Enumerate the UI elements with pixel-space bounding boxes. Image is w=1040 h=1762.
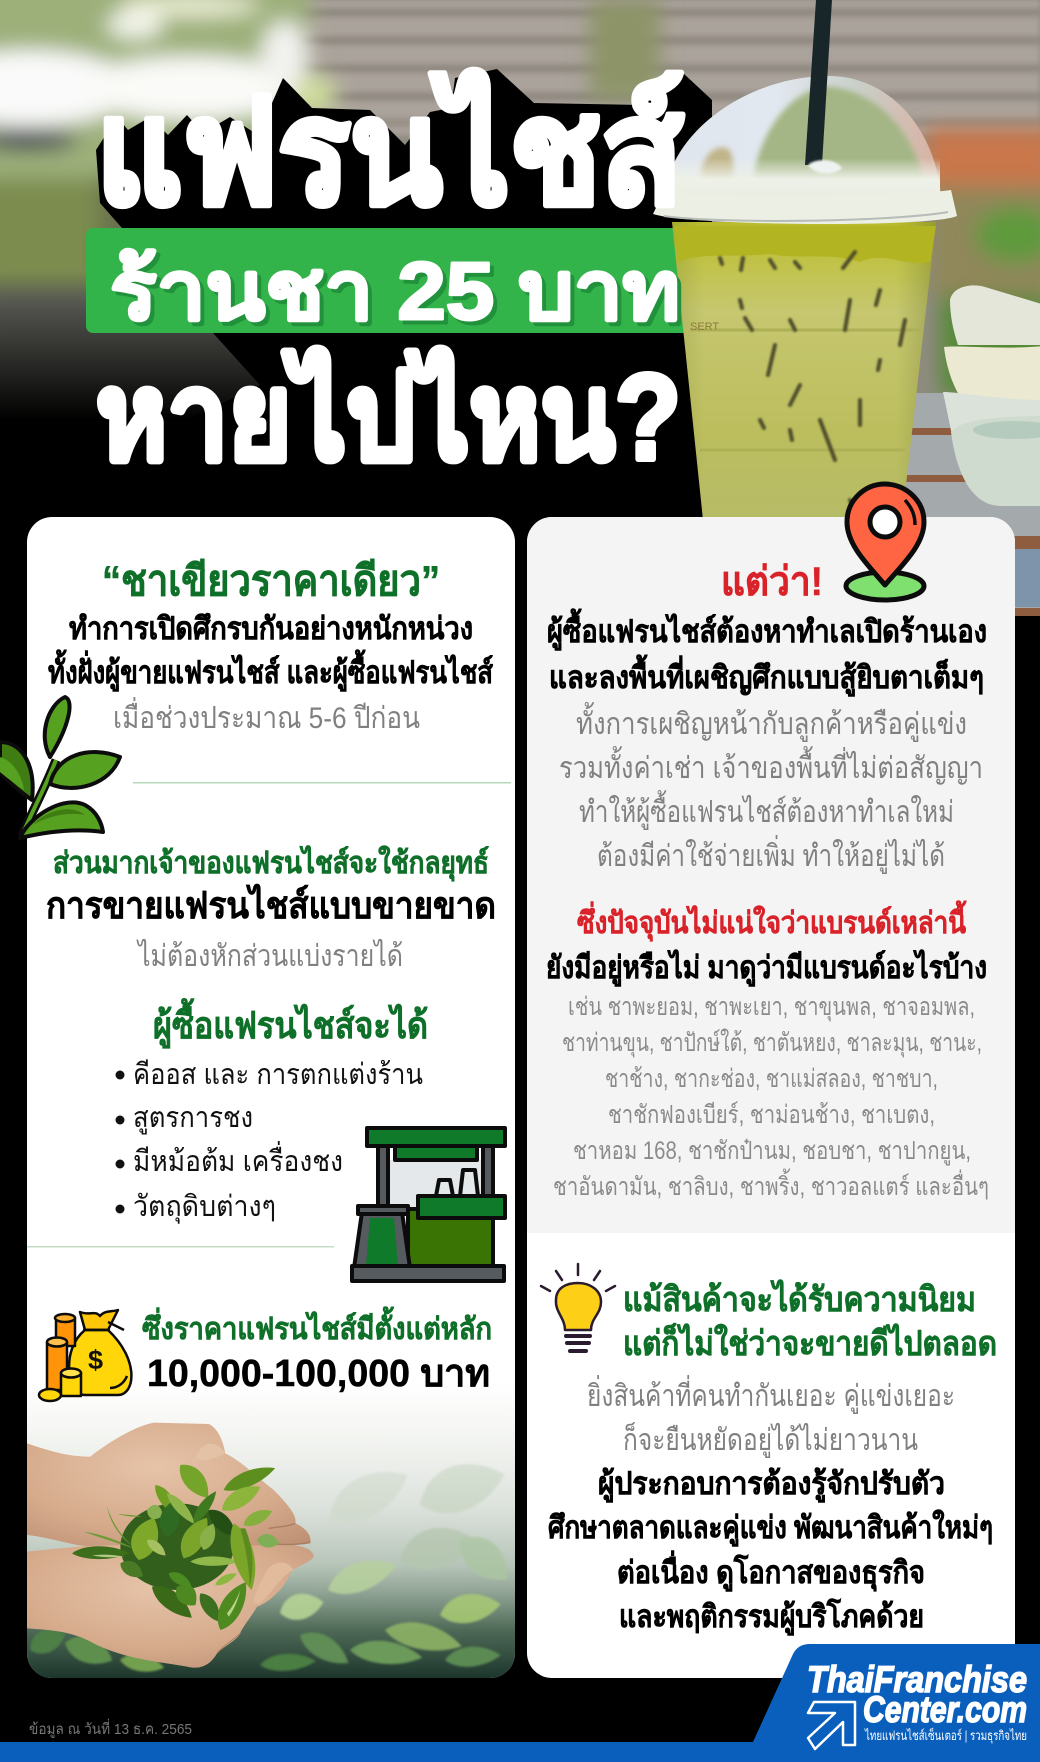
icon: tea leaves sprig <box>0 697 120 838</box>
list: buyer benefits <box>116 1059 423 1224</box>
logo text <box>807 1659 1027 1744</box>
heading: popularity not forever <box>623 1279 997 1363</box>
text: brand list <box>553 993 989 1201</box>
list: buyer benefits: สูตรการชง <box>133 1102 253 1135</box>
text: brand list: ชาช้าง, ชากะช่อง, ชาแม่สลอง, ชาชบา, <box>605 1065 938 1093</box>
heading: popularity not forever: แต่ก็ไม่ใช่ว่าจะขายดีไปตลอด <box>623 1322 997 1363</box>
title line 2: ร้านชา 25 บาท <box>114 250 684 341</box>
heading: what buyers get: ผู้ซื้อแฟรนไชส์จะได้ <box>153 998 428 1049</box>
icon: tea kiosk <box>352 1128 505 1281</box>
text: location challenge: ผู้ซื้อแฟรนไชส์ต้องหาทำเลเปิดร้านเอง <box>547 608 987 651</box>
text: franchise price range: 10,000-100,000 บาท <box>147 1353 490 1395</box>
title line 2: ร้านชา 25 บาท <box>110 246 680 337</box>
text: advice to operators: ก็จะยืนหยัดอยู่ได้ไม่ยาวนาน <box>623 1421 918 1458</box>
text: price war intro <box>48 611 493 735</box>
text: brand list: ชาชักฟองเบียร์, ชาม่อนช้าง, ชาเบตง, <box>608 1101 935 1129</box>
title banner green box <box>86 228 696 333</box>
icon: money bag and coins: $ <box>88 1345 103 1375</box>
footer blue bar <box>0 1742 1040 1762</box>
text: franchise price range: ซึ่งราคาแฟรนไชส์มีตั้งแต่หลัก <box>142 1306 492 1346</box>
icon: stacked ceramic bowls <box>943 285 1040 506</box>
text: location challenge <box>547 608 987 874</box>
list: buyer benefits: วัตถุดิบต่างๆ <box>133 1191 276 1224</box>
icon: location pin <box>846 484 924 600</box>
list: buyer benefits: คีออส และ การตกแต่งร้าน <box>133 1059 423 1091</box>
hero background photo <box>0 0 1040 618</box>
logo arrow <box>808 1702 855 1749</box>
text: location challenge: ต้องมีค่าใช้จ่ายเพิ่ม ทำให้อยู่ไม่ได้ <box>597 835 945 874</box>
heading: popularity not forever: แม้สินค้าจะได้รับความนิยม <box>623 1279 976 1319</box>
title long shadow <box>0 69 712 520</box>
text: location challenge: ทำให้ผู้ซื้อแฟรนไชส์ต้องหาทำเลใหม่ <box>579 790 954 830</box>
text: advice to operators <box>548 1375 993 1636</box>
icon: iced green tea cup <box>653 0 957 520</box>
text: location challenge: ทั้งการเผชิญหน้ากับลูกค้าหรือคู่แข่ง <box>576 702 967 742</box>
cup print text: SERT <box>690 321 719 333</box>
text: advice to operators: ยิ่งสินค้าที่คนทำกันเยอะ คู่แข่งเยอะ <box>587 1375 955 1414</box>
heading: brands uncertainty <box>546 900 987 987</box>
text: sales strategy: ส่วนมากเจ้าของแฟรนไชส์จะใช้กลยุทธ์ <box>53 845 489 882</box>
text: advice to operators: และพฤติกรรมผู้บริโภคด้วย <box>619 1598 924 1636</box>
text: price war intro: เมื่อช่วงประมาณ 5-6 ปีก่อน <box>113 697 420 735</box>
text: franchise price range <box>142 1306 492 1395</box>
text: price war intro: ทำการเปิดศึกรบกันอย่างหนักหน่วง <box>69 611 473 646</box>
text: advice to operators: ผู้ประกอบการต้องรู้จักปรับตัว <box>598 1466 945 1503</box>
text: sales strategy <box>46 845 496 973</box>
hands and leaves drawn at zoom scale <box>27 1423 314 1668</box>
title line 1: แฟรนไชส์ <box>96 69 683 234</box>
text: price war intro: ทั้งฝั่งผู้ขายแฟรนไชส์ และผู้ซื้อแฟรนไชส์ <box>48 649 493 692</box>
source note: ข้อมูล ณ วันที่ 13 ธ.ค. 2565 <box>29 1718 192 1738</box>
text: advice to operators: ต่อเนื่อง ดูโอกาสของธุรกิจ <box>617 1550 925 1592</box>
heading: brands uncertainty: ซึ่งปัจจุบันไม่แน่ใจว่าแบรนด์เหล่านี้ <box>577 900 967 942</box>
icon: light bulb <box>541 1264 615 1351</box>
title line 3: หายไปไหน? <box>96 348 681 485</box>
text: sales strategy: การขายแฟรนไชส์แบบขายขาด <box>46 883 496 926</box>
footer logo block <box>735 1644 1040 1762</box>
text: sales strategy: ไม่ต้องหักส่วนแบ่งรายได้ <box>136 938 403 973</box>
icon: money bag and coins <box>39 1310 131 1401</box>
panel: right card <box>527 517 1015 1678</box>
heading: single-price green tea: “ชาเขียวราคาเดียว” <box>102 557 440 604</box>
heading: but: แต่ว่า! <box>721 560 823 604</box>
photo: hands holding tea leaves <box>27 1413 515 1678</box>
list: buyer benefits: มีหม้อต้ม เครื่องชง <box>133 1141 343 1178</box>
hero fade to black <box>0 270 300 420</box>
panel: left card <box>25 517 519 1678</box>
text: location challenge: และลงพื้นที่เผชิญศึกแบบสู้ยิบตาเต็มๆ <box>549 654 984 697</box>
